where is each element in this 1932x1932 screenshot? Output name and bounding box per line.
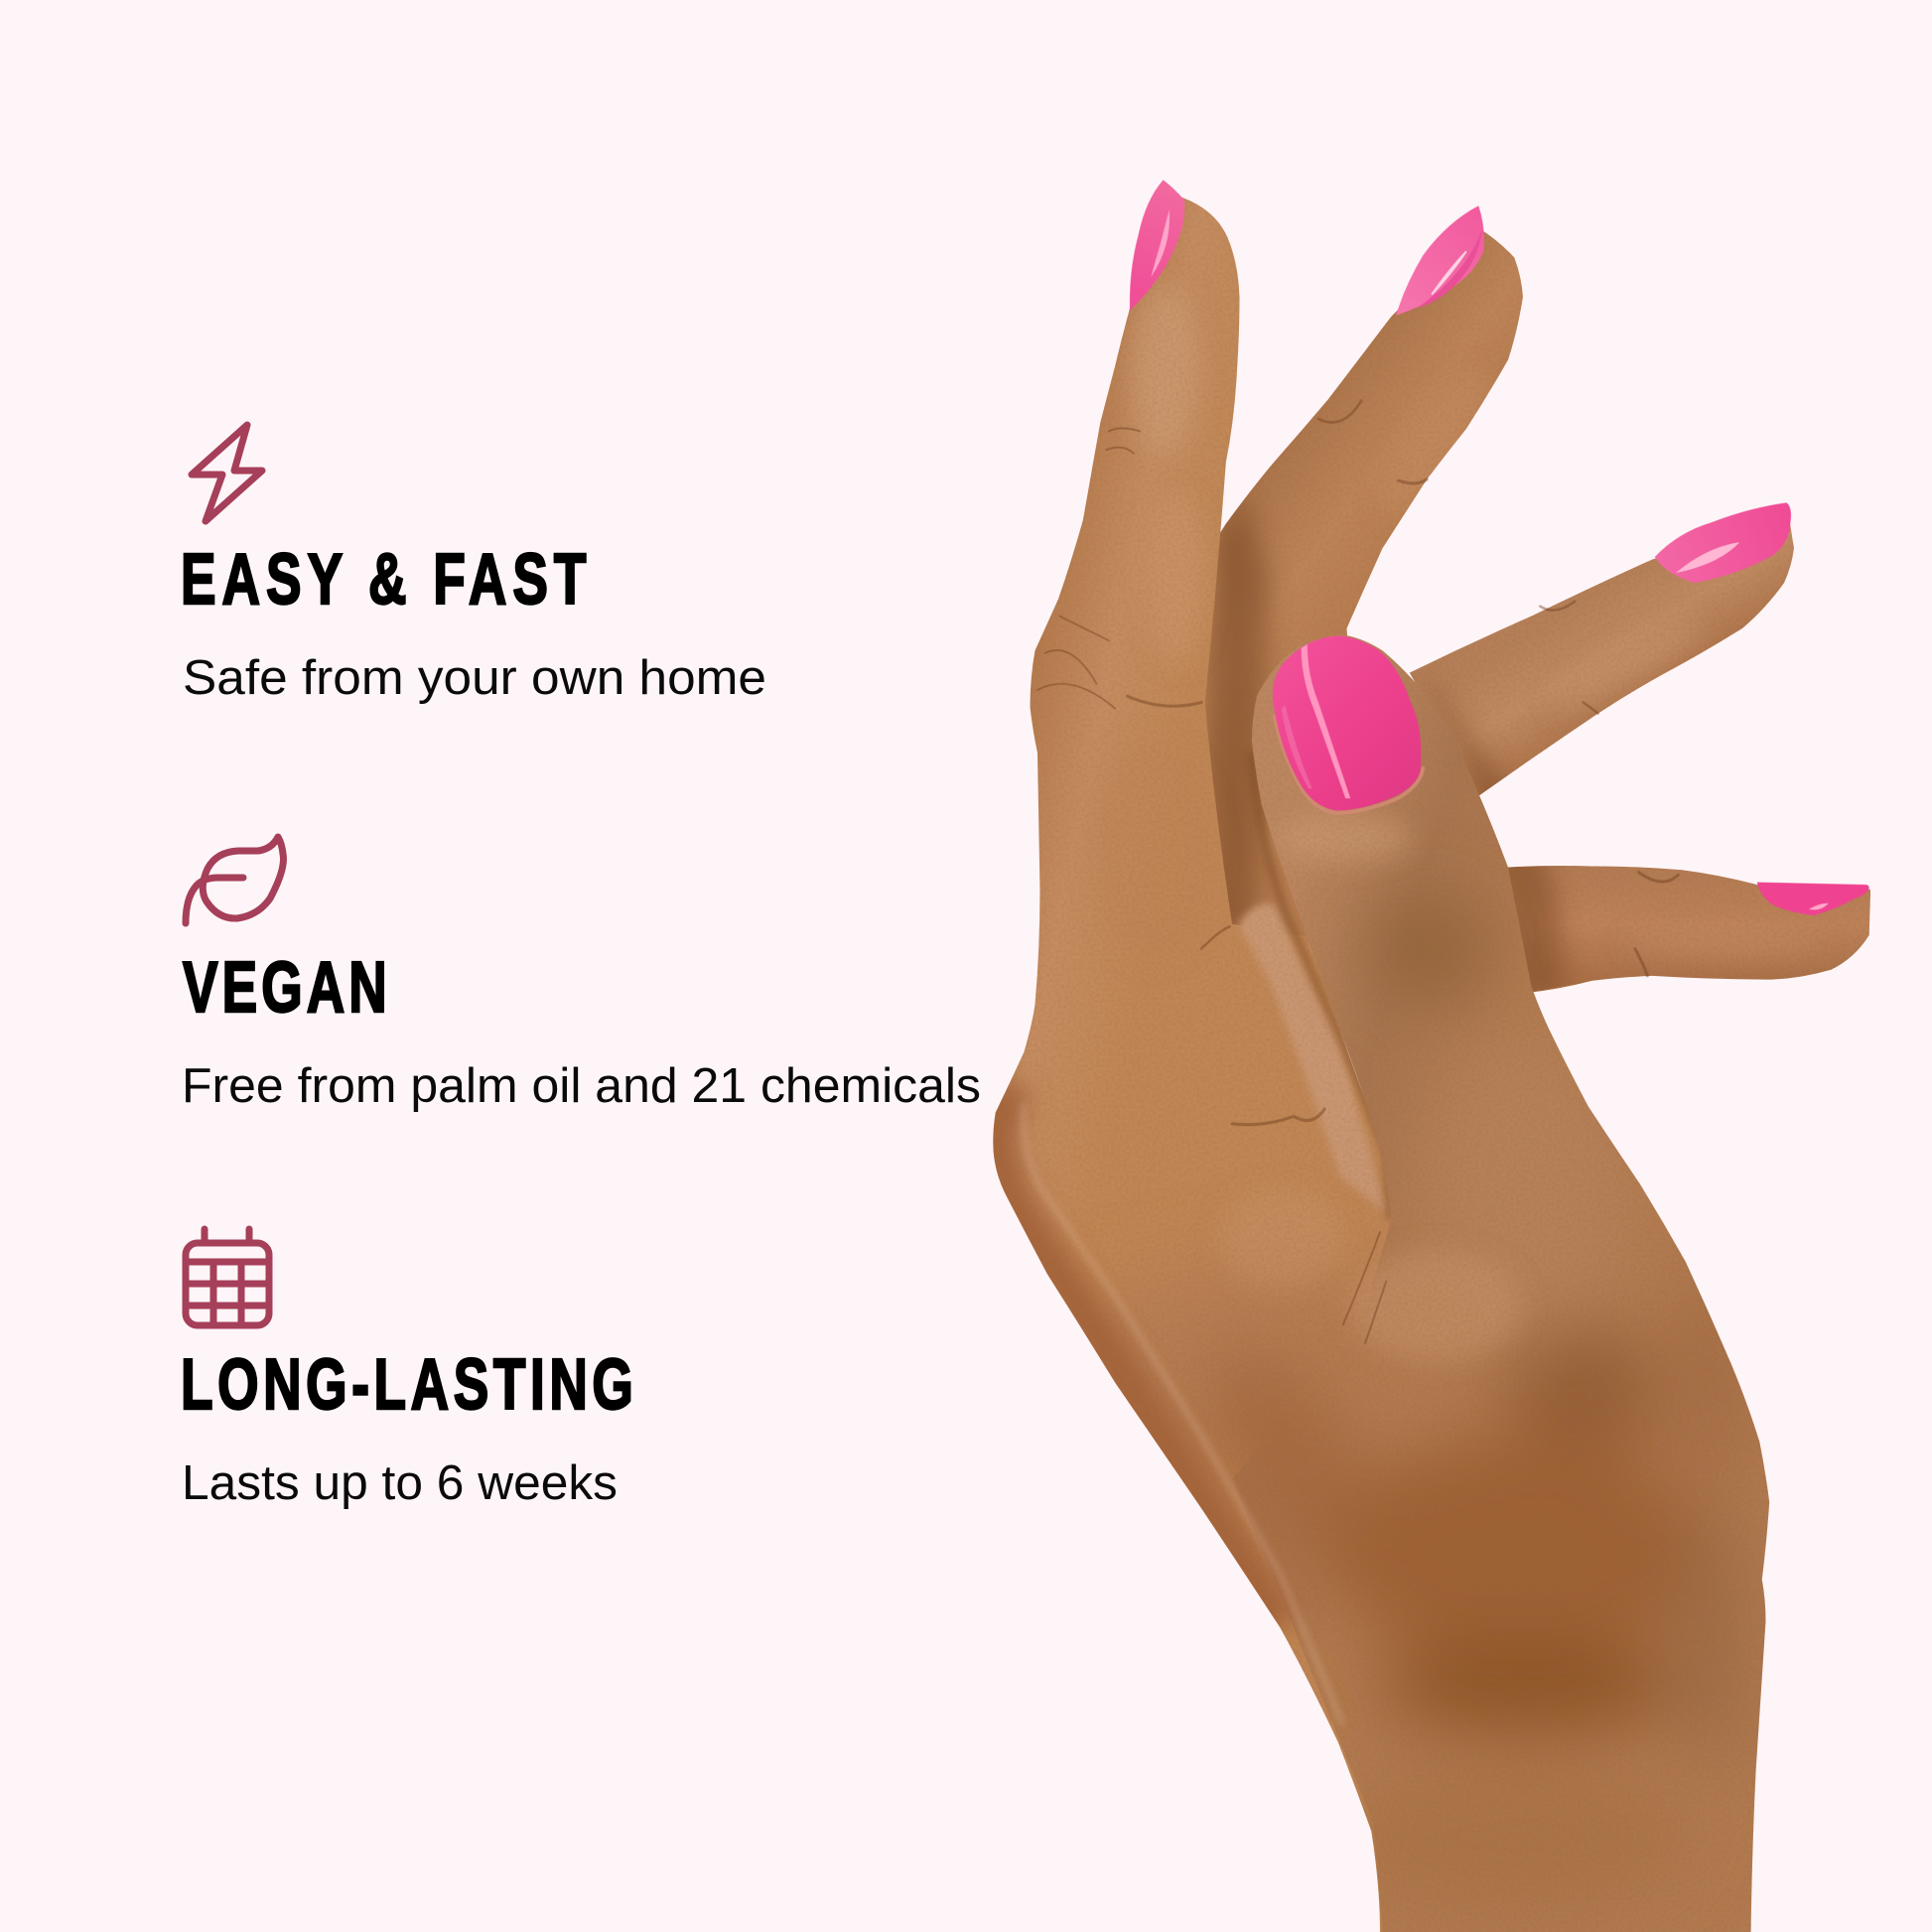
shadow beside thumb bbox=[1252, 752, 1390, 1220]
feature: vegan bbox=[182, 837, 981, 1113]
nail: middle finger bbox=[1396, 206, 1484, 316]
skin shading bbox=[986, 173, 1885, 1932]
text: lasts up to 6 weeks: Lasts up to 6 weeks bbox=[182, 1456, 618, 1510]
nail: thumb bbox=[1273, 635, 1423, 813]
illustration: hand with pink nails bbox=[986, 173, 1885, 1932]
nail: ring finger bbox=[1655, 502, 1791, 583]
feature: easy and fast bbox=[181, 425, 766, 705]
shadows cast on fingers bbox=[1195, 492, 1565, 998]
thumb and back of hand bbox=[1232, 634, 1769, 1932]
rim light along palm edge bbox=[1024, 1103, 1343, 1725]
nail: little finger bbox=[1757, 883, 1869, 915]
feature: long-lasting bbox=[181, 1229, 633, 1510]
heading: easy and fast: EASY & FAST bbox=[181, 540, 586, 620]
icon: lightning bolt bbox=[192, 425, 262, 521]
icon: calendar bbox=[186, 1229, 269, 1325]
skin grain bbox=[1019, 205, 1866, 1770]
infographic canvas bbox=[182, 180, 1870, 1932]
little finger bbox=[1504, 866, 1870, 993]
heading: long-lasting: LONG-LASTING bbox=[181, 1345, 633, 1425]
icon: leaf bbox=[186, 837, 283, 923]
text: free from palm oil: Free from palm oil and 21 chemicals bbox=[182, 1059, 981, 1113]
ring finger bbox=[1410, 517, 1794, 796]
heading: vegan: VEGAN bbox=[183, 948, 387, 1028]
nail: index finger bbox=[1130, 180, 1184, 311]
index finger and palm bbox=[993, 198, 1751, 1932]
skin creases bbox=[1037, 400, 1678, 1343]
inner palm fold bbox=[1238, 903, 1387, 1213]
text: safe from your own home: Safe from your own home bbox=[183, 651, 766, 705]
middle finger bbox=[1182, 228, 1523, 961]
